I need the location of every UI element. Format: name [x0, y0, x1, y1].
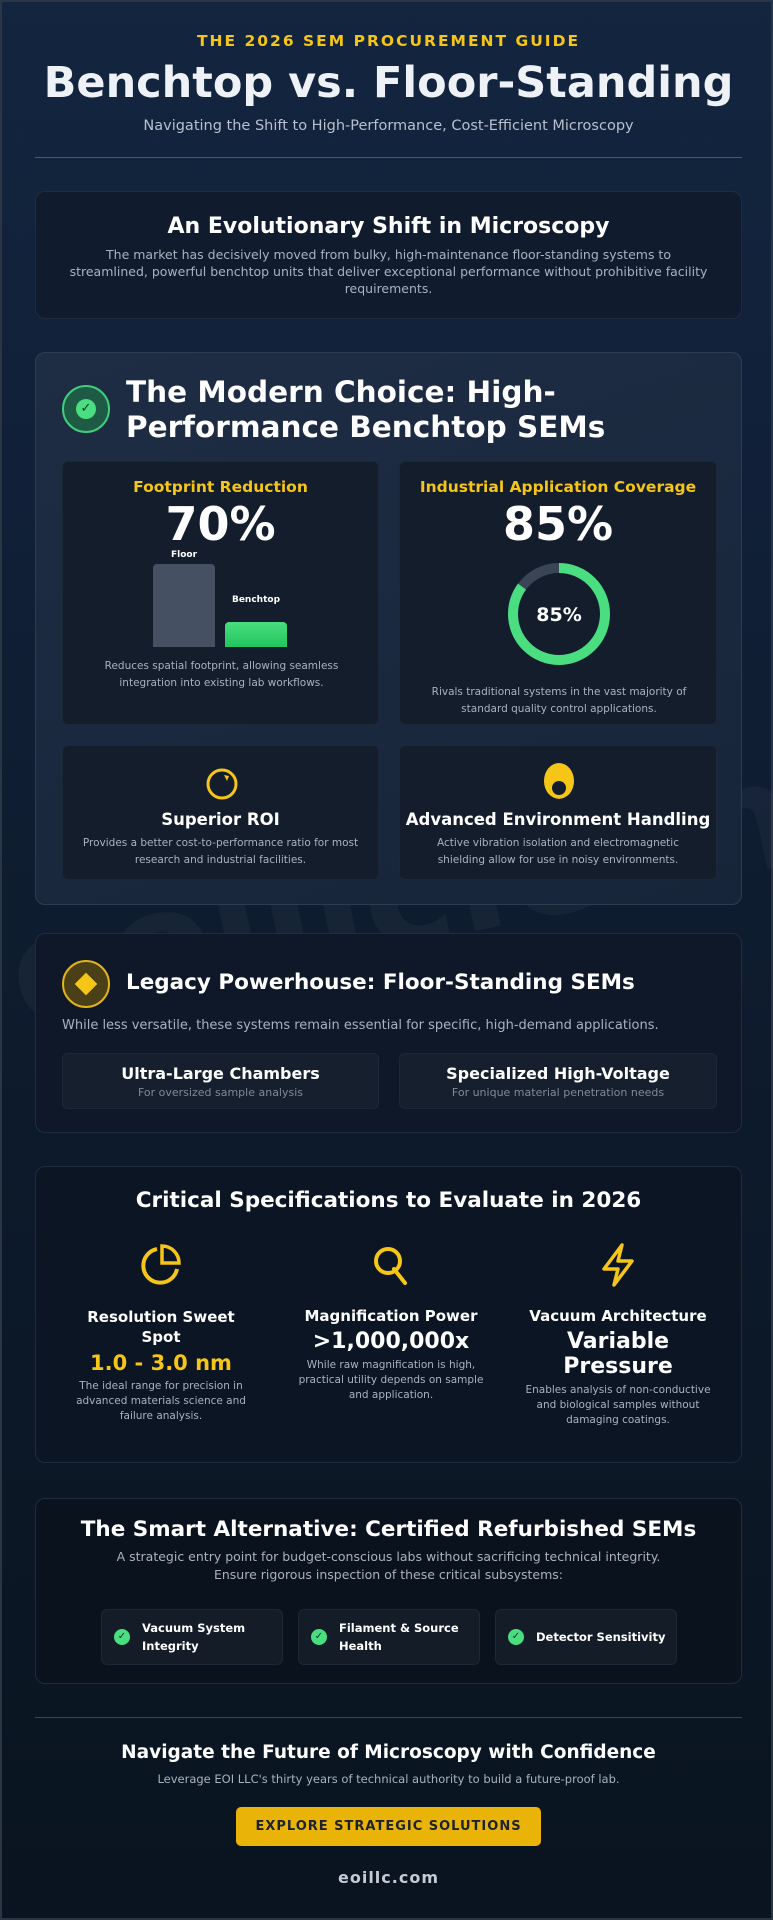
bar chart [153, 550, 287, 647]
spec: resolution: 1.0 - 3.0 nm [90, 1351, 232, 1375]
spec: resolution [76, 1244, 246, 1422]
card: footprint: 70% [165, 497, 276, 551]
header [44, 32, 733, 134]
spec: resolution: Spot [141, 1328, 181, 1346]
panel: legacy [35, 933, 742, 1133]
panel: refurbished: The Smart Alternative: Certified Refurbished SEMs [81, 1517, 696, 1542]
panel: legacy: While less versatile, these systems remain essential for specific, high-demand applications. [62, 1018, 659, 1033]
icon: check: ✓ [81, 401, 91, 416]
spec: magnification: While raw magnification is high, practical utility depends on sample and application. [299, 1359, 483, 1401]
pill: detector: ✓ [512, 1631, 520, 1642]
footer: Leverage EOI LLC's thirty years of technical authority to build a future-proof lab. [157, 1772, 620, 1786]
card: environment: Advanced Environment Handling [406, 810, 710, 829]
spec: resolution: Resolution Sweet [87, 1308, 235, 1326]
pill: filament [298, 1609, 480, 1665]
button: EXPLORE STRATEGIC SOLUTIONS [255, 1819, 522, 1834]
pill: vacuum: Integrity [142, 1639, 199, 1653]
card: coverage: Industrial Application Coverage [420, 478, 696, 496]
pill: filament: Health [339, 1639, 382, 1653]
panel: specs: Critical Specifications to Evaluate in 2026 [136, 1188, 641, 1213]
footer: Navigate the Future of Microscopy with Confidence [121, 1742, 656, 1763]
card: ROI: Provides a better cost-to-performance ratio for most research and industrial facilities. [83, 837, 358, 866]
pill: detector: Detector Sensitivity [536, 1630, 665, 1644]
header: Benchtop vs. Floor-Standing [44, 58, 733, 108]
header: Navigating the Shift to High-Performance, Cost-Efficient Microscopy [143, 118, 634, 134]
panel: evolutionary shift: requirements. [345, 281, 432, 296]
footer [121, 1742, 656, 1887]
panel: evolutionary shift: The market has decisively moved from bulky, high-maintenance floor-standing systems to [106, 247, 671, 262]
heading: Performance Benchtop SEMs [126, 410, 605, 444]
spec: magnification [299, 1247, 483, 1401]
card: coverage: Rivals traditional systems in the vast majority of standard quality control applications. [432, 686, 686, 715]
card: footprint: Reduces spatial footprint, allowing seamless integration into existing lab workflows. [105, 660, 338, 689]
pill: filament: Filament & Source [339, 1621, 459, 1635]
panel: evolutionary shift: An Evolutionary Shift in Microscopy [168, 214, 610, 239]
spec: vacuum: Enables analysis of non-conductive and biological samples without damaging coatings. [525, 1384, 711, 1426]
box: high voltage: For unique material penetration needs [452, 1086, 664, 1099]
box: chambers [62, 1053, 379, 1109]
panel: evolutionary shift: streamlined, powerful benchtop units that deliver exceptional performance without prohibitive facility [70, 264, 707, 279]
box: chambers: Ultra-Large Chambers [121, 1064, 320, 1083]
spec: vacuum: Pressure [563, 1354, 673, 1379]
heading [126, 375, 605, 444]
spec: vacuum [525, 1243, 711, 1426]
pill: detector [495, 1609, 677, 1665]
box: high voltage: Specialized High-Voltage [446, 1064, 670, 1083]
box: high voltage [399, 1053, 717, 1109]
icon: check [62, 385, 110, 433]
box: chambers: For oversized sample analysis [138, 1086, 303, 1099]
spec: magnification: Magnification Power [304, 1307, 477, 1325]
card: ROI: Superior ROI [161, 810, 280, 829]
heading: Legacy Powerhouse: Floor-Standing SEMs [126, 970, 635, 995]
card: coverage: 85% [503, 497, 613, 551]
donut chart: 85% [536, 604, 582, 626]
icon: shield [544, 763, 574, 799]
spec: vacuum: Variable [567, 1329, 669, 1354]
panel: refurbished [35, 1498, 742, 1684]
panel: evolutionary shift [35, 191, 742, 319]
card: environment [399, 745, 717, 880]
spec: vacuum: Vacuum Architecture [529, 1307, 707, 1325]
pill: vacuum: Vacuum System [142, 1621, 245, 1635]
panel: modern choice [35, 352, 742, 905]
button [236, 1807, 541, 1846]
bar chart: Benchtop [232, 595, 280, 605]
heading: The Modern Choice: High- [126, 375, 556, 409]
footer: eoillc.com [338, 1868, 439, 1887]
bar chart: Floor [171, 550, 197, 560]
card: ROI [62, 745, 379, 880]
pill: vacuum [101, 1609, 283, 1665]
header: THE 2026 SEM PROCUREMENT GUIDE [197, 32, 580, 50]
icon: legacy [62, 960, 110, 1008]
pill: vacuum: ✓ [118, 1631, 126, 1642]
panel: refurbished: A strategic entry point for budget-conscious labs without sacrificing technical integrity. [117, 1549, 660, 1564]
card: environment: Active vibration isolation and electromagnetic shielding allow for use in noisy environments. [437, 837, 679, 866]
panel: refurbished: Ensure rigorous inspection of these critical subsystems: [214, 1567, 563, 1582]
card: coverage [399, 461, 717, 725]
spec: resolution: The ideal range for precision in advanced materials science and failure analysis. [76, 1380, 246, 1422]
card: footprint [62, 461, 379, 725]
pill: filament: ✓ [315, 1631, 323, 1642]
panel: specs [35, 1166, 742, 1463]
icon: gauge [206, 768, 238, 800]
donut chart [508, 563, 610, 665]
spec: magnification: >1,000,000x [313, 1329, 469, 1354]
card: footprint: Footprint Reduction [133, 478, 308, 496]
